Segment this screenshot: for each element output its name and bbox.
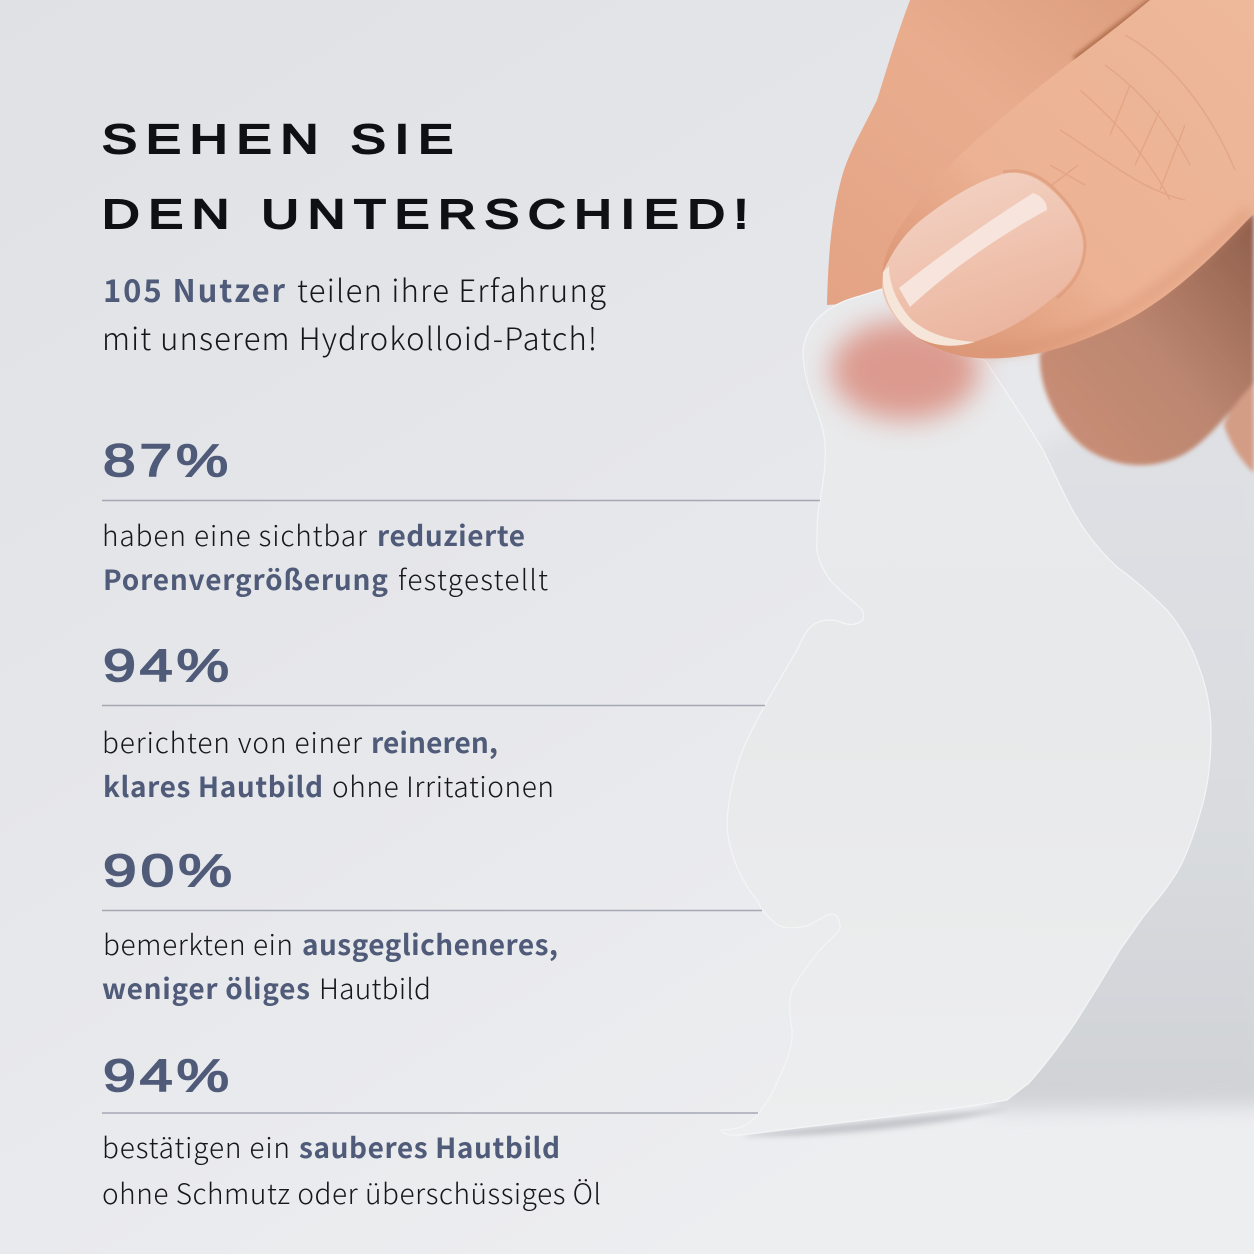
icon: upper finger xyxy=(827,0,1200,305)
stat: 87% xyxy=(102,435,820,599)
crease between fingers xyxy=(1075,0,1160,60)
stat: 90%: weniger öliges xyxy=(102,968,310,1008)
stat: 87%: 87% xyxy=(103,435,232,486)
stat: 94% reineres Hautbild: reineren, xyxy=(371,722,498,762)
shadow behind patch on the right xyxy=(990,400,1254,1110)
stat: 94% reineres Hautbild: berichten von einer xyxy=(102,722,363,762)
intro text: mit unserem Hydrokolloid-Patch! xyxy=(102,314,597,359)
stat: 90%: Hautbild xyxy=(319,968,431,1008)
icon: hydrocolloid patch xyxy=(721,289,1211,1135)
stat: 87%: festgestellt xyxy=(398,559,548,599)
stat: 87%: Porenvergrößerung xyxy=(103,559,388,599)
title xyxy=(102,116,757,237)
stat: 94% sauberes Hautbild xyxy=(102,1050,758,1213)
stat: 87%: reduzierte xyxy=(377,515,525,555)
stat: 94% sauberes Hautbild: bestätigen ein xyxy=(102,1127,290,1167)
thumb skin creases xyxy=(1050,35,1235,200)
fingertip seen through patch xyxy=(831,320,979,420)
icon: thumb with nail xyxy=(882,0,1254,358)
nail tip rim xyxy=(883,266,975,346)
nail cuticle shadow xyxy=(1003,171,1085,298)
stat: 90% xyxy=(102,845,762,1008)
patch ground shadow xyxy=(745,1108,1010,1136)
stat: 90%: bemerkten ein xyxy=(103,924,293,964)
thumb underside shading xyxy=(985,210,1250,352)
stat: 94% reineres Hautbild: ohne Irritationen xyxy=(332,766,554,806)
thumb skin xyxy=(882,0,1254,358)
title: DEN UNTERSCHIED! xyxy=(102,191,757,237)
patch body xyxy=(721,289,1211,1135)
stat: 94% sauberes Hautbild: 94% xyxy=(103,1050,233,1101)
stat: 94% sauberes Hautbild: ohne Schmutz oder überschüssiges Öl xyxy=(102,1173,601,1213)
stat: 94% sauberes Hautbild: sauberes Hautbild xyxy=(299,1127,560,1167)
icon: rear fingers of the hand xyxy=(1040,213,1254,473)
intro text: 105 Nutzer xyxy=(103,266,285,311)
stat: 94% reineres Hautbild: klares Hautbild xyxy=(103,766,323,806)
nail xyxy=(882,173,1083,346)
stat: 87%: haben eine sichtbar xyxy=(102,515,368,555)
intro text: teilen ihre Erfahrung xyxy=(297,266,606,311)
stat: 94% reineres Hautbild xyxy=(102,640,765,806)
title: SEHEN SIE xyxy=(102,116,462,162)
stat: 90%: 90% xyxy=(103,845,236,896)
nail highlight band xyxy=(899,193,1047,307)
stat: 94% reineres Hautbild: 94% xyxy=(103,640,233,691)
stat: 90%: ausgeglicheneres, xyxy=(302,924,558,964)
intro text xyxy=(102,266,606,359)
